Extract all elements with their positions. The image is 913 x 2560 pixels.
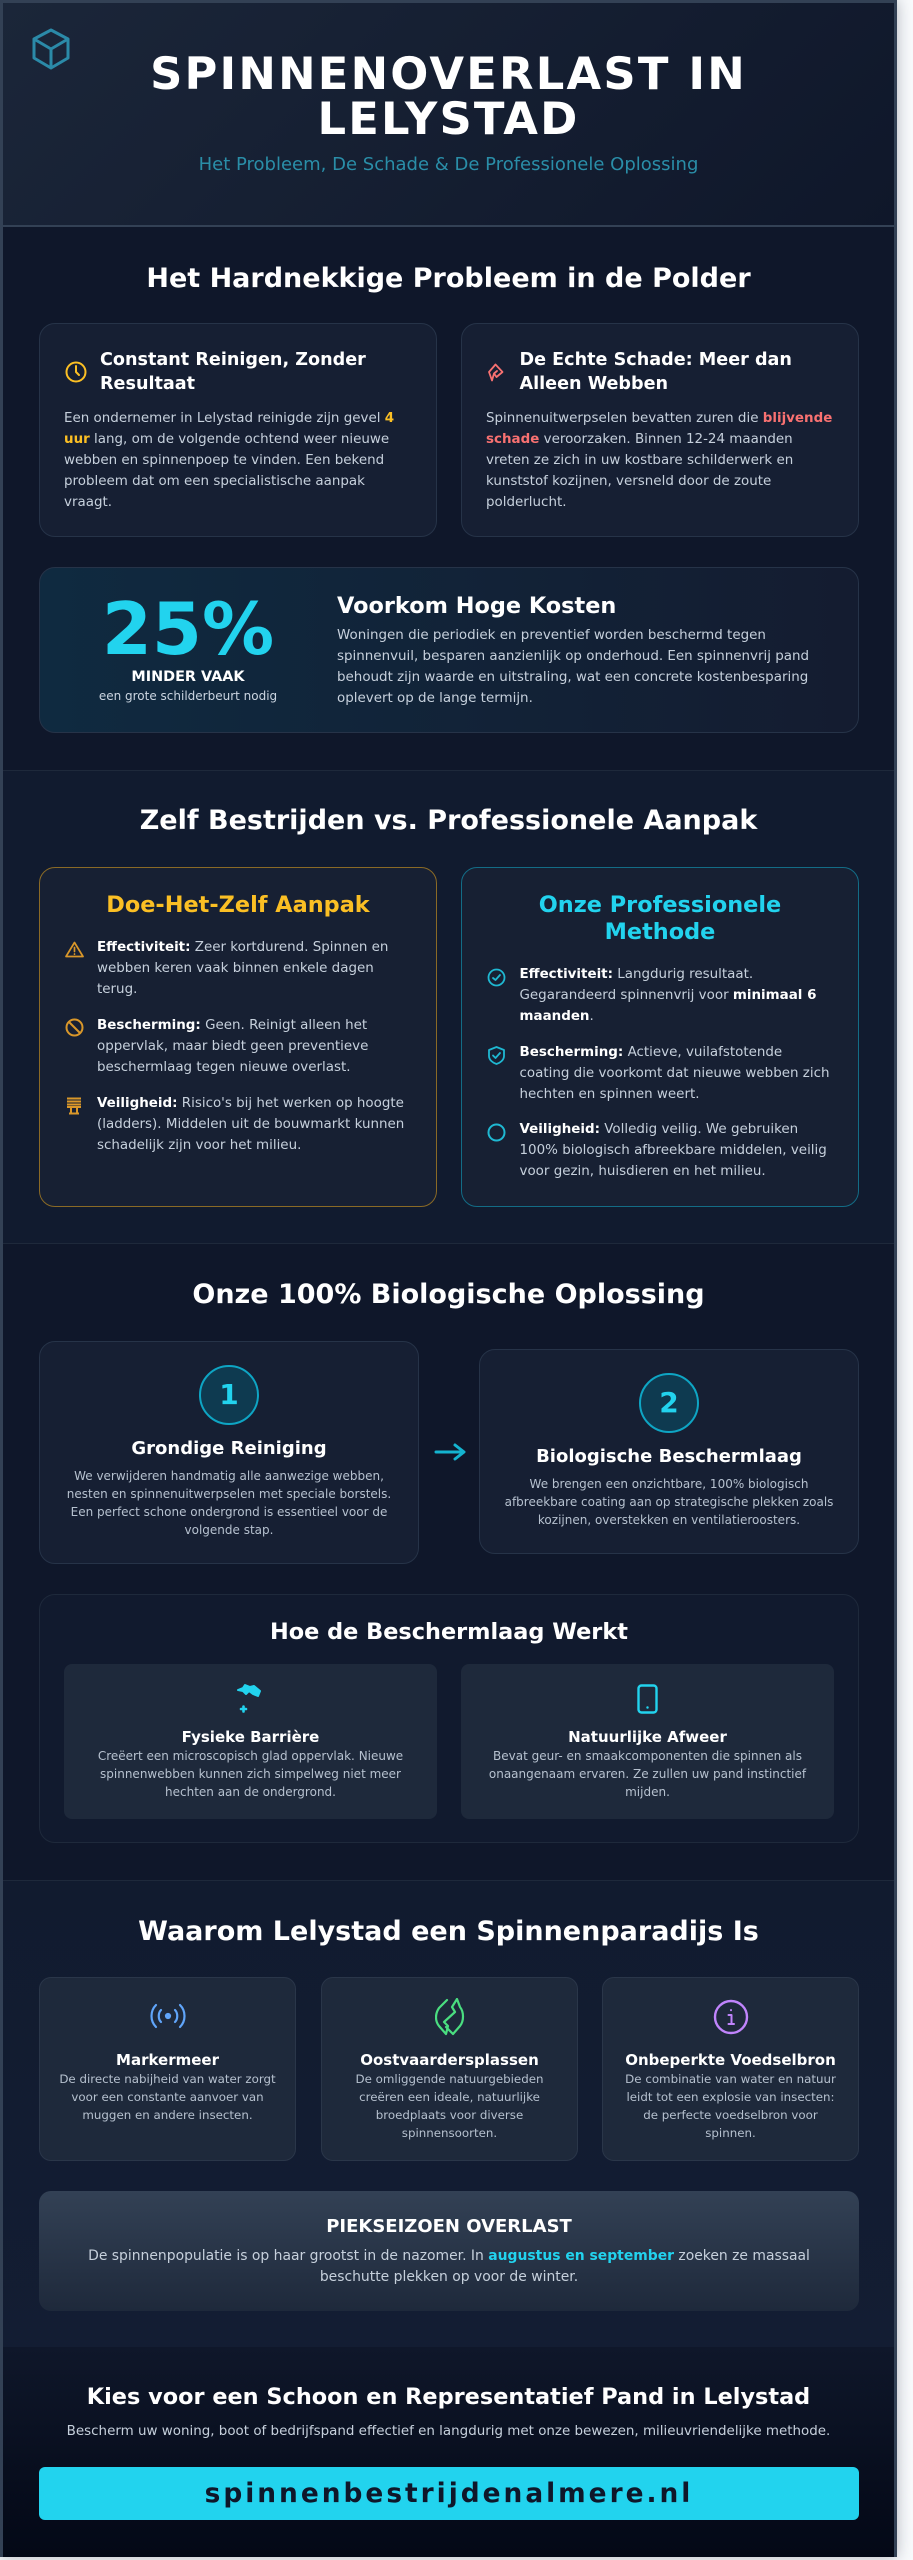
card text: de perfecte voedselbron voor bbox=[643, 2108, 818, 2122]
number badge bbox=[639, 1373, 699, 1433]
card text: muggen en andere insecten. bbox=[82, 2108, 253, 2122]
header bbox=[0, 0, 897, 228]
card text: broedplaats voor diverse bbox=[376, 2108, 523, 2122]
stat text: oplevert op de lange termijn. bbox=[337, 690, 533, 706]
item: effectiveness: maanden. bbox=[520, 1008, 594, 1024]
card text: De directe nabijheid van water zorgt bbox=[59, 2072, 276, 2086]
card heading: Constant Reinigen, Zonder bbox=[100, 350, 366, 370]
card: Markermeer bbox=[39, 1977, 296, 2161]
card text: webben en spinnenpoep te vinden. Een bekend bbox=[64, 452, 384, 468]
call to action bbox=[39, 2467, 859, 2520]
item: effectiveness: Effectiviteit: Langdurig resultaat. bbox=[520, 966, 753, 982]
heading: Het Hardnekkige Probleem in de Polder bbox=[146, 262, 751, 294]
icon: clock bbox=[66, 362, 86, 382]
step title: Grondige Reiniging bbox=[131, 1438, 327, 1459]
stat text bbox=[337, 628, 809, 706]
card text bbox=[59, 2072, 276, 2122]
item: protection bbox=[97, 1018, 368, 1074]
title: SPINNENOVERLAST IN bbox=[150, 47, 747, 100]
card text bbox=[625, 2072, 836, 2140]
item: protection: oppervlak, maar biedt geen preventieve bbox=[97, 1038, 368, 1054]
card text: creëren een ideale, natuurlijke bbox=[359, 2090, 540, 2104]
card title: Oostvaardersplassen bbox=[360, 2051, 539, 2069]
icon: cube bbox=[32, 28, 70, 70]
sub-panel: natural repellent bbox=[461, 1664, 834, 1819]
item: safety: 100% biologisch afbreekbare middelen, veilig bbox=[520, 1143, 827, 1158]
step text: afbreekbare coating aan op strategische plekken zoals bbox=[505, 1495, 833, 1509]
stat text: behoudt zijn waarde en uitstraling, wat een concrete kostenbesparing bbox=[337, 670, 808, 684]
footer text: Bescherm uw woning, boot of bedrijfspand effectief en langdurig met onze bewezen, milieuvriendelijke methode. bbox=[67, 2424, 830, 2439]
icon: check circle bbox=[488, 968, 506, 986]
step text bbox=[67, 1469, 391, 1537]
item: protection bbox=[520, 1044, 829, 1102]
item: safety: Veiligheid: Volledig veilig. We gebruiken bbox=[520, 1122, 798, 1137]
callout title: PIEKSEIZOEN OVERLAST bbox=[326, 2216, 572, 2236]
icon: info bbox=[714, 2000, 748, 2034]
panel heading: Doe-Het-Zelf Aanpak bbox=[106, 892, 370, 918]
card text: spinnen. bbox=[705, 2126, 756, 2140]
heading: Onze 100% Biologische Oplossing bbox=[192, 1279, 705, 1310]
panel heading bbox=[539, 892, 781, 944]
sub-panel title: Fysieke Barrière bbox=[182, 1728, 319, 1746]
card heading: Alleen Webben bbox=[520, 374, 668, 394]
card text: kunststof kozijnen, versneld door de zoute bbox=[486, 474, 771, 488]
number badge: 2 bbox=[659, 1386, 679, 1419]
step text: Een perfect schone ondergrond is essentieel voor de bbox=[71, 1505, 387, 1519]
stat text: spinnenvuil, besparen aanzienlijk op onderhoud. Een spinnenvrij pand bbox=[337, 648, 809, 664]
icon: tag bbox=[488, 364, 504, 382]
icon: barrier bbox=[237, 1684, 261, 1713]
card heading bbox=[520, 350, 792, 394]
icon: ladder block bbox=[67, 1098, 81, 1114]
card text: spinnensoorten. bbox=[402, 2126, 497, 2140]
card heading: Resultaat bbox=[100, 374, 195, 394]
step text: volgende stap. bbox=[185, 1523, 273, 1537]
sub-panel text bbox=[489, 1749, 806, 1799]
card text: De combinatie van water en natuur bbox=[625, 2072, 836, 2086]
item: protection: beschermlaag tegen nieuwe overlast. bbox=[97, 1060, 351, 1074]
step text: We verwijderen handmatig alle aanwezige webben, bbox=[74, 1469, 384, 1483]
icon: signal bbox=[150, 2004, 186, 2028]
arrow bbox=[434, 1443, 466, 1461]
footer heading: Kies voor een Schoon en Representatief Pand in Lelystad bbox=[87, 2384, 810, 2410]
section: comparison bbox=[3, 770, 894, 1243]
card text bbox=[64, 410, 394, 510]
card text bbox=[486, 410, 832, 510]
step text: We brengen een onzichtbare, 100% biologisch bbox=[530, 1477, 808, 1491]
sub-panel text: spinnenwebben kunnen zich simpelweg niet meer bbox=[100, 1767, 401, 1781]
sub-panel text bbox=[98, 1749, 403, 1799]
step 2 bbox=[479, 1349, 859, 1554]
icon: circle bbox=[488, 1124, 506, 1142]
item: effectiveness: webben keren vaak binnen enkele dagen bbox=[97, 960, 374, 976]
number badge: 1 bbox=[219, 1378, 239, 1411]
step text bbox=[505, 1477, 833, 1527]
card text: leidt tot een explosie van insecten: bbox=[626, 2090, 835, 2104]
item: effectiveness: terug. bbox=[97, 982, 137, 996]
heading: Waarom Lelystad een Spinnenparadijs Is bbox=[138, 1916, 759, 1947]
panel: DIY bbox=[39, 867, 437, 1207]
sub-panel text: mijden. bbox=[625, 1785, 670, 1799]
card text: probleem dat om een specialistische aanpak bbox=[64, 474, 365, 488]
stat label: MINDER VAAK bbox=[131, 669, 245, 685]
sub-panel text: hechten aan de ondergrond. bbox=[165, 1785, 336, 1799]
card text: uur lang, om de volgende ochtend weer nieuwe bbox=[64, 432, 389, 446]
card text: polderlucht. bbox=[486, 494, 567, 510]
callout text: beschutte plekken op voor de winter. bbox=[320, 2268, 578, 2284]
panel: professional bbox=[461, 867, 859, 1207]
panel: how the layer works bbox=[39, 1594, 859, 1843]
item: protection: Bescherming: Geen. Reinigt alleen het bbox=[97, 1018, 367, 1032]
card text: De omliggende natuurgebieden bbox=[356, 2072, 543, 2086]
panel heading: Onze Professionele bbox=[539, 892, 781, 918]
card heading bbox=[100, 350, 366, 394]
item: safety: Veiligheid: Risico's bij het werken op hoogte bbox=[97, 1096, 404, 1110]
item: safety: schadelijk zijn voor het milieu. bbox=[97, 1138, 301, 1152]
item: safety: voor gezin, huisdieren en het milieu. bbox=[520, 1164, 766, 1179]
sub-panel: barrier bbox=[64, 1664, 437, 1819]
item: safety bbox=[520, 1122, 827, 1179]
callout text: De spinnenpopulatie is op haar grootst in de nazomer. In augustus en september zoeken ze massaal bbox=[88, 2248, 810, 2264]
icon: no sign bbox=[66, 1018, 84, 1036]
item: protection: Bescherming: Actieve, vuilafstotende bbox=[520, 1044, 782, 1060]
item: effectiveness bbox=[97, 940, 388, 996]
card text: Een ondernemer in Lelystad reinigde zijn gevel 4 bbox=[64, 410, 394, 426]
section: solution bbox=[3, 1243, 894, 1880]
icon: shield bbox=[488, 1046, 505, 1065]
section: problem bbox=[3, 227, 894, 770]
item: safety: (ladders). Middelen uit de bouwmarkt kunnen bbox=[97, 1116, 404, 1132]
panel: stat bbox=[39, 567, 859, 733]
step 1 bbox=[39, 1341, 419, 1564]
card text: Spinnenuitwerpselen bevatten zuren die blijvende bbox=[486, 410, 832, 426]
card text bbox=[356, 2072, 543, 2140]
item: effectiveness: Effectiviteit: Zeer kortdurend. Spinnen en bbox=[97, 940, 388, 954]
panel heading: Methode bbox=[605, 918, 715, 944]
sub-panel text: onaangenaam ervaren. Ze zullen uw pand instinctief bbox=[489, 1767, 806, 1781]
card text: schade veroorzaken. Binnen 12-24 maanden bbox=[486, 432, 793, 446]
step text: nesten en spinnenuitwerpselen met speciale borstels. bbox=[67, 1487, 391, 1501]
card text: voor een constante aanvoer van bbox=[71, 2090, 264, 2104]
sub-panel title: Natuurlijke Afweer bbox=[568, 1728, 727, 1746]
subtitle: Het Probleem, De Schade & De Professionele Oplossing bbox=[199, 154, 698, 175]
card text: vreten ze zich in uw kostbare schilderwerk en bbox=[486, 452, 793, 468]
callout: peak season bbox=[39, 2191, 859, 2311]
card heading: De Echte Schade: Meer dan bbox=[520, 350, 792, 370]
sub-panel text: Creëert een microscopisch glad oppervlak. Nieuwe bbox=[98, 1749, 403, 1763]
footer bbox=[3, 2347, 894, 2557]
sub-panel text: Bevat geur- en smaakcomponenten die spinnen als bbox=[493, 1749, 802, 1763]
title bbox=[150, 47, 747, 145]
icon: cycle bbox=[435, 1998, 464, 2036]
item: effectiveness: Gegarandeerd spinnenvrij voor minimaal 6 bbox=[520, 988, 816, 1002]
card title: Onbeperkte Voedselbron bbox=[625, 2051, 836, 2069]
card title: Markermeer bbox=[116, 2051, 219, 2069]
title: LELYSTAD bbox=[318, 92, 579, 145]
icon: warning bbox=[65, 942, 84, 958]
item: protection: hechten en spinnen weert. bbox=[520, 1086, 700, 1102]
stat text: Woningen die periodiek en preventief worden beschermd tegen bbox=[337, 628, 766, 642]
card: Oostvaardersplassen bbox=[321, 1977, 578, 2161]
call to action: spinnenbestrijdenalmere.nl bbox=[205, 2478, 693, 2509]
stat heading: Voorkom Hoge Kosten bbox=[337, 593, 616, 619]
item: safety bbox=[97, 1096, 404, 1152]
panel: real damage bbox=[461, 323, 859, 537]
item: protection: coating die voorkomt dat nieuwe webben zich bbox=[520, 1066, 829, 1080]
callout text bbox=[88, 2248, 810, 2284]
item: effectiveness bbox=[520, 966, 816, 1024]
section: why Lelystad bbox=[3, 1880, 894, 2347]
card: food source bbox=[602, 1977, 859, 2161]
number badge bbox=[199, 1365, 259, 1425]
step title: Biologische Beschermlaag bbox=[536, 1446, 802, 1467]
panel: constant cleaning bbox=[39, 323, 437, 537]
heading: Zelf Bestrijden vs. Professionele Aanpak bbox=[140, 805, 757, 836]
stat: 25%: 25% bbox=[102, 587, 274, 671]
stat note: een grote schilderbeurt nodig bbox=[99, 689, 277, 703]
icon: phone bbox=[637, 1684, 658, 1714]
card text: vraagt. bbox=[64, 494, 112, 510]
step text: kozijnen, overstekken en ventilatieroosters. bbox=[538, 1513, 800, 1527]
panel heading: Hoe de Beschermlaag Werkt bbox=[270, 1619, 628, 1645]
